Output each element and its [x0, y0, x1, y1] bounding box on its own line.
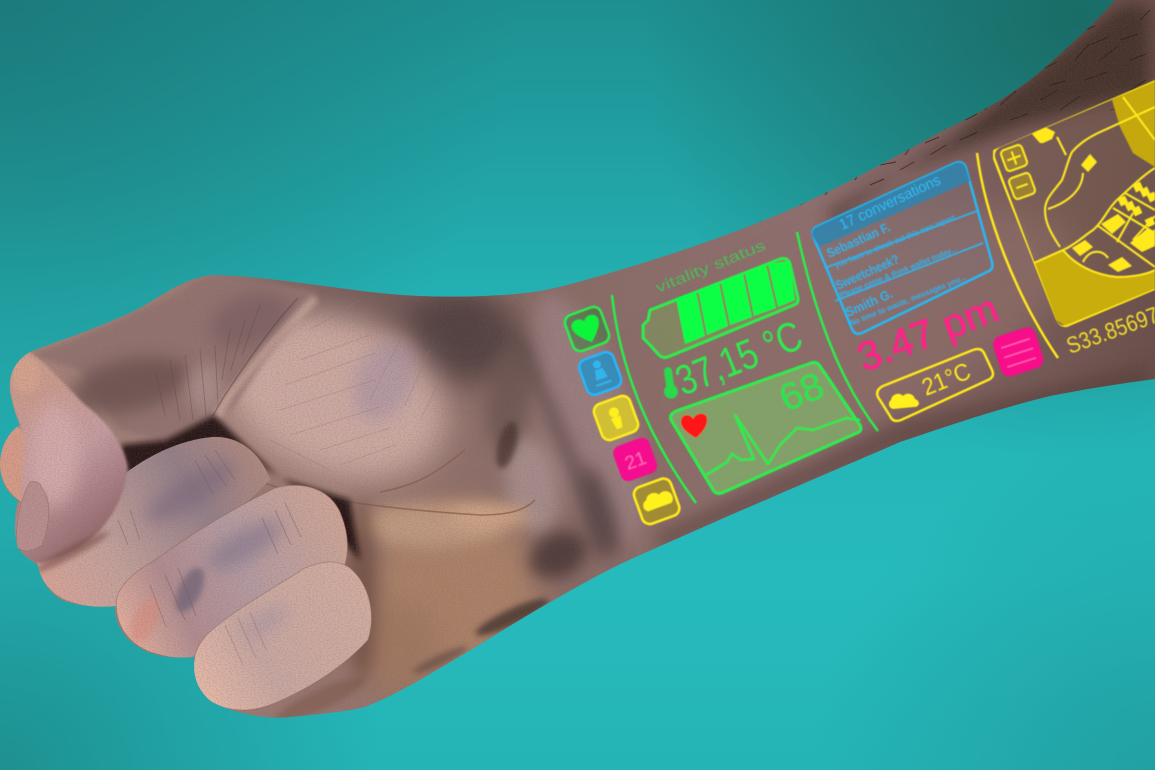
- icon: yellow tile: [592, 394, 640, 442]
- crease between thumb and palm: [216, 298, 316, 418]
- map block: top right: [1112, 80, 1155, 167]
- panel header: [812, 162, 970, 247]
- zoom in button: [1000, 144, 1028, 172]
- small finger tip behind thumb: [0, 426, 24, 502]
- map buildings: [1032, 126, 1155, 272]
- row 1 preview: you have to check out this new report...: [833, 211, 962, 270]
- row 1 name: Sebastian F.: [824, 219, 892, 261]
- map border: [994, 80, 1155, 327]
- map background: [1010, 95, 1155, 276]
- battery gauge: [643, 237, 798, 358]
- map panel: [993, 80, 1155, 327]
- icon: yellow cloud tile: [632, 476, 682, 526]
- hand dark thumb area: [30, 277, 318, 440]
- message panel: [812, 162, 992, 334]
- header text: 17 conversations: [837, 172, 943, 234]
- wrist base mauve: [527, 294, 646, 542]
- forearm mid skin: [913, 210, 1070, 370]
- index finger: [36, 437, 270, 607]
- time reading: 3.47 pm: [851, 287, 1004, 380]
- heel of palm tan: [376, 528, 550, 676]
- wrist pale mottled patch: [500, 434, 564, 536]
- pill outline: [877, 349, 993, 421]
- pulse reading: 68: [774, 365, 830, 420]
- icon: pink date tile: [611, 436, 659, 483]
- battery cells: [676, 261, 795, 344]
- finger base shadow: [276, 678, 364, 718]
- icon: pink date tile: 21: [622, 448, 649, 475]
- thumb top wrinkles: [155, 305, 260, 420]
- map roads: [1025, 97, 1155, 277]
- ECG trace: [706, 415, 860, 475]
- palm wrinkles: [270, 300, 445, 470]
- wrist vein shadows: [522, 522, 594, 588]
- panel outline: [813, 162, 992, 334]
- thermometer icon: [661, 366, 679, 400]
- thumb-base light pad: [224, 292, 460, 494]
- icon: cloud: [889, 394, 919, 409]
- palm creases: [255, 450, 535, 515]
- finger-side palm shadow: [347, 500, 377, 680]
- heart-rate panel: [671, 362, 861, 494]
- temperature reading: 37,15 °C: [669, 311, 809, 404]
- middle finger: [116, 485, 348, 658]
- icon: green heart tile: [563, 305, 611, 353]
- list rows: [825, 211, 983, 301]
- thumb: [9, 352, 127, 563]
- icon: pink calendar: [991, 325, 1046, 379]
- icon: blue person tile: [577, 350, 623, 397]
- zoom out button: [1008, 172, 1036, 200]
- thumb under-shadow: [38, 530, 110, 574]
- divider: green right: [797, 232, 878, 431]
- divider: yellow: [977, 153, 1058, 358]
- label: vitality status: vitality status: [653, 237, 768, 297]
- ring finger: [193, 562, 371, 710]
- row 2 name: Sweetcheek?: [833, 251, 901, 293]
- panel body: [671, 362, 861, 494]
- map block: bottom: [1025, 250, 1155, 327]
- palm-finger gap shadow: [120, 415, 360, 560]
- weather pill: [877, 349, 993, 421]
- divider: green left: [612, 295, 696, 503]
- thumb nail: [16, 481, 49, 551]
- temperature: 21°C: [918, 358, 975, 402]
- forearm hairy dark top band: [830, 5, 1150, 225]
- forearm dark lower edge: [655, 362, 1150, 550]
- icon: red heart: [681, 414, 707, 438]
- row 2 preview: Please come & think wallet today...: [838, 245, 958, 300]
- forearm hair: [760, 10, 1150, 222]
- wrist dark diagonal tendon: [515, 340, 605, 555]
- wristband display: projected UI: [563, 80, 1155, 526]
- back of hand dark top: [242, 276, 458, 332]
- row 3 name: Smith G.: [843, 286, 895, 320]
- battery outline: [643, 259, 798, 358]
- row 3 preview: No time to waste, messages you...: [848, 273, 968, 328]
